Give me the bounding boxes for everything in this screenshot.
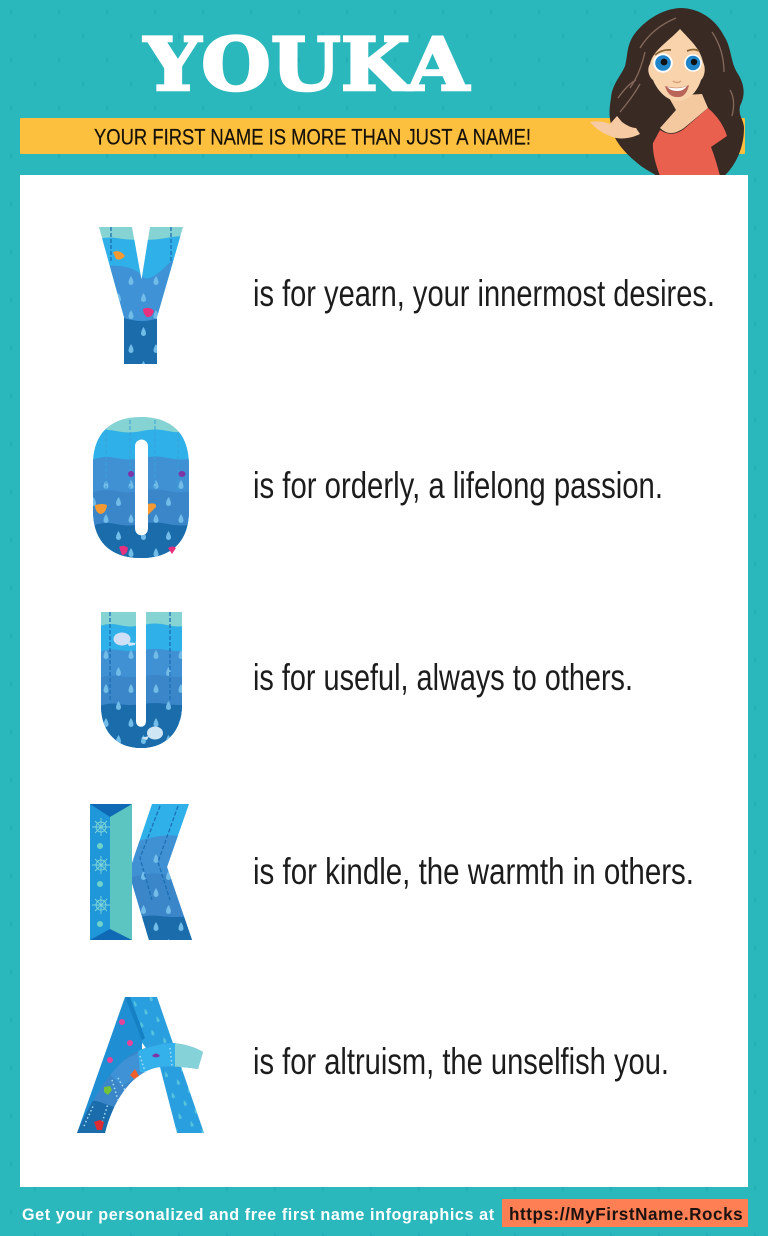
letter O illustration	[90, 415, 192, 561]
text: U line: is for useful, always to others.	[253, 657, 633, 698]
yellow subtitle banner	[20, 118, 745, 154]
snowflake ornaments	[92, 818, 110, 914]
footer text: Get your personalized and free first name infographics at	[22, 1205, 495, 1224]
footer link badge: https://MyFirstName.Rocks	[509, 1204, 743, 1224]
hair	[610, 8, 744, 178]
footer link badge	[502, 1199, 748, 1227]
neck and chest	[660, 94, 708, 133]
subtitle text: YOUR FIRST NAME IS MORE THAN JUST A NAME!	[94, 124, 531, 150]
right arm and leg	[132, 804, 192, 940]
panel: white content area	[20, 175, 748, 1187]
ribbon arch	[77, 1043, 203, 1133]
eyes	[653, 53, 702, 73]
left leg	[77, 997, 142, 1133]
character: woman with long brown hair	[590, 8, 744, 178]
right leg	[125, 997, 204, 1133]
letter Y illustration	[99, 227, 183, 364]
smile	[665, 85, 689, 97]
nose	[673, 81, 681, 82]
small flowers and fish	[119, 1019, 125, 1025]
left stem	[90, 804, 111, 940]
face	[648, 29, 705, 101]
icons: small fish on O	[95, 471, 186, 555]
icon: orange fish	[113, 251, 125, 260]
icon: pink fish	[143, 308, 154, 317]
letter K illustration	[90, 800, 195, 945]
eyebrows	[655, 50, 699, 55]
letter A illustration	[77, 997, 204, 1133]
icon: whales	[114, 632, 163, 740]
hand	[590, 116, 640, 138]
shirt	[653, 108, 727, 176]
dotted ribbon lines	[84, 1048, 172, 1126]
letter U illustration	[101, 612, 182, 748]
title: YOUKA	[143, 22, 470, 108]
text: O line: is for orderly, a lifelong passion.	[253, 465, 663, 506]
text: A line: is for altruism, the unselfish you.	[253, 1041, 669, 1082]
